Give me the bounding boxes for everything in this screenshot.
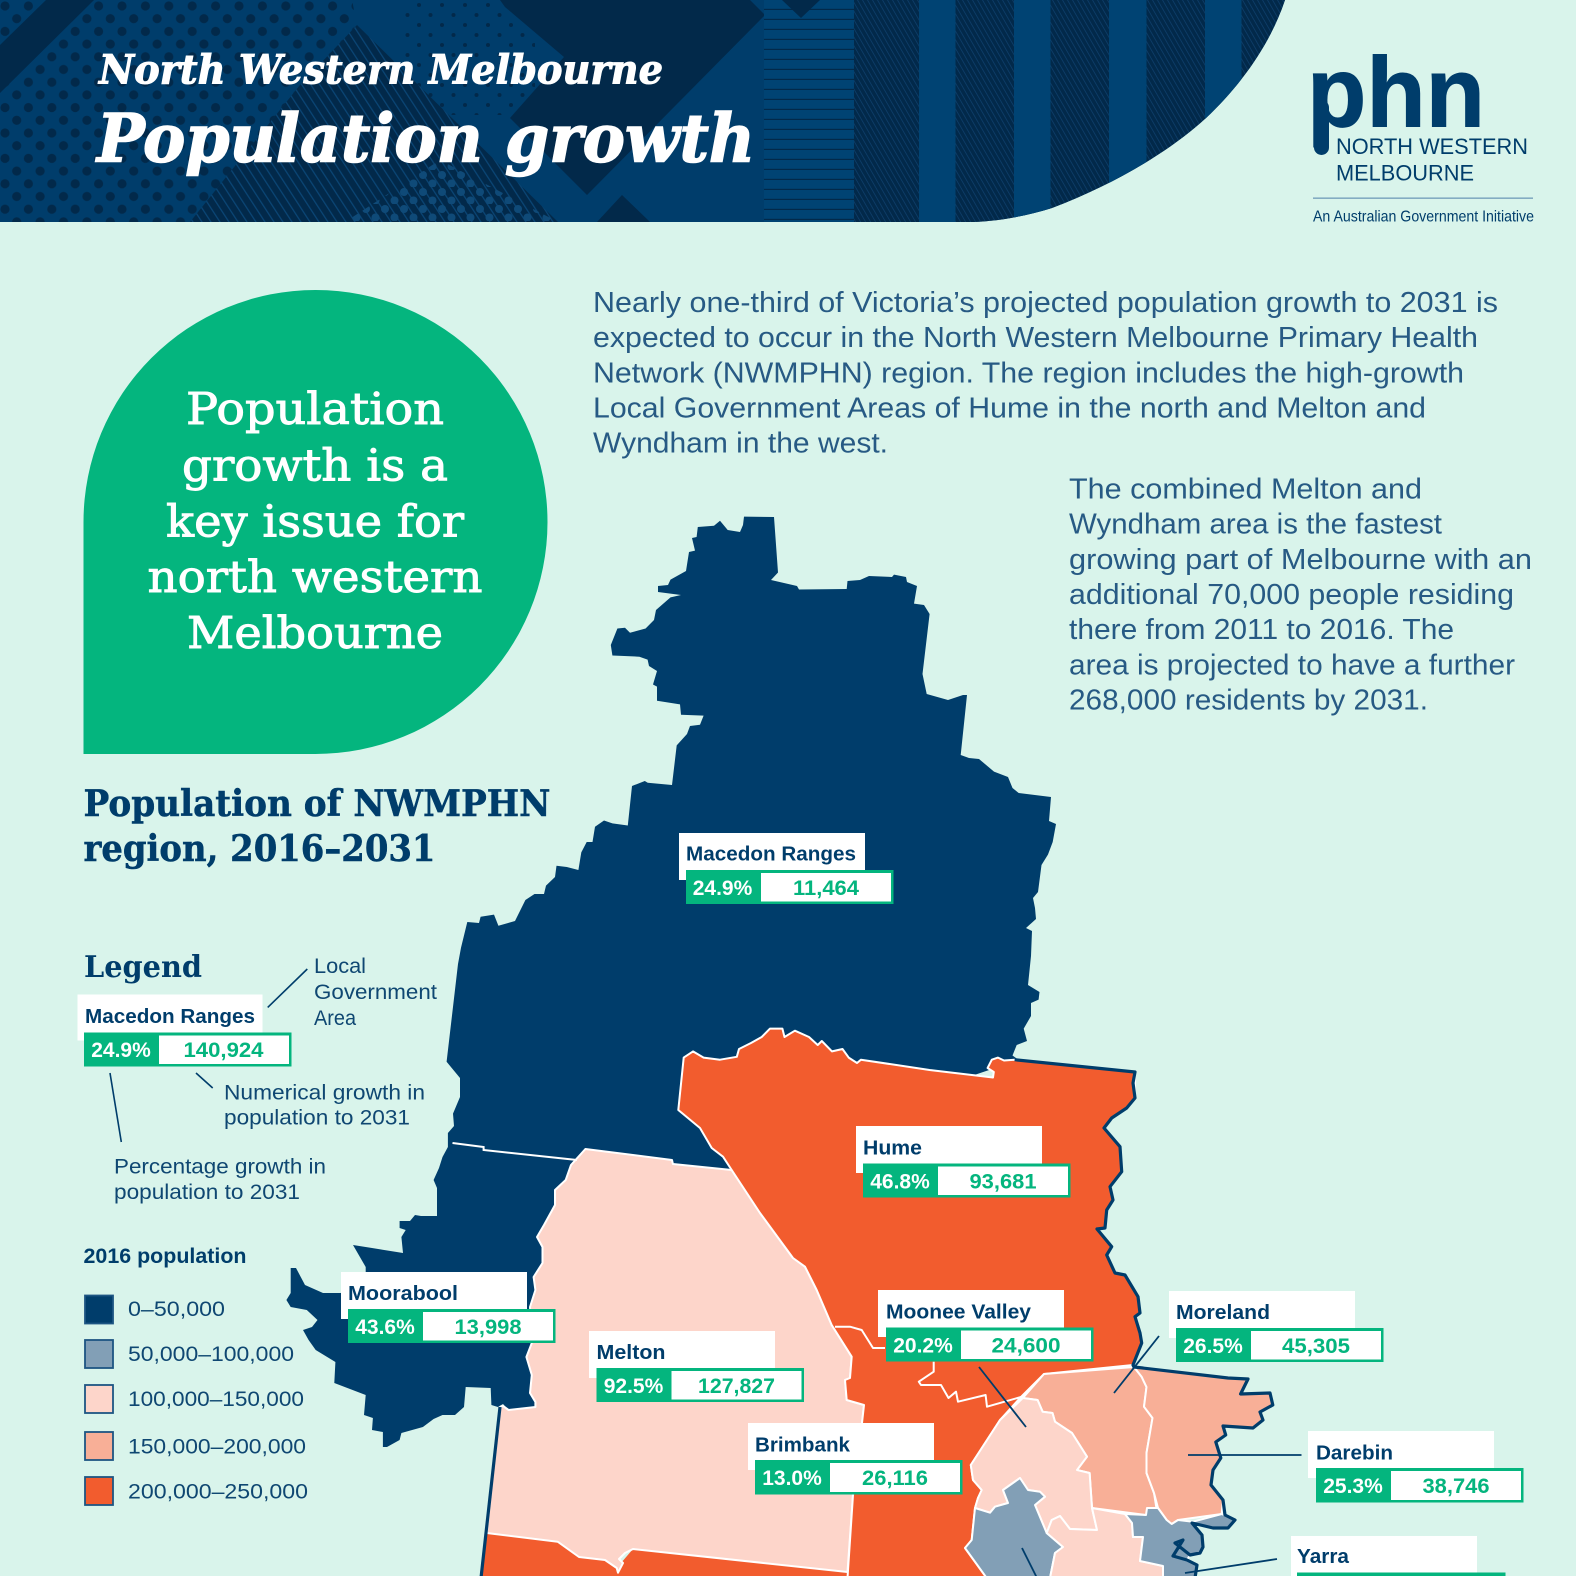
callout bubble: north western [148,552,482,603]
leader line: Moonee Valley [979,1367,1026,1427]
region: Moreland [1023,1367,1156,1515]
label: Moonee Valley: 20.2% [893,1334,953,1358]
annotation: Local Government Area: Local [314,955,366,978]
region: Darebin [1134,1367,1273,1524]
annotation: Local Government Area: Area [314,1007,356,1030]
label: Moreland [1169,1291,1384,1362]
label: Moonee Valley: 24,600 [992,1334,1060,1358]
region outline: western boundary [481,1407,500,1576]
legend sample label [78,994,292,1066]
label: Moreland: 45,305 [1282,1335,1350,1358]
logo: PHN North Western Melbourne [1307,36,1534,226]
2016 population scale heading: 2016 population [84,1245,246,1268]
second paragraph: Wyndham area is the fastest [1069,508,1442,540]
intro paragraph: Wyndham in the west. [593,428,888,460]
colour scale labels: 150,000–200,000 [128,1436,306,1458]
second paragraph: there from 2011 to 2016. The [1069,614,1454,646]
region: Maribyrnong [965,1478,1063,1576]
intro paragraph: Network (NWMPHN) region. The region includes the high-growth [593,358,1464,390]
second paragraph: growing part of Melbourne with an [1069,544,1532,576]
annotation: numerical growth [196,1073,425,1130]
label: Hume: 46.8% [870,1170,930,1194]
chart heading: Population of NWMPHN [84,783,550,825]
chart heading [84,783,550,870]
label: Moreland: Moreland [1176,1301,1270,1324]
boundary: Hume and Brimbank [835,1327,1021,1407]
label: Melton: 127,827 [698,1375,775,1398]
label: Moonee Valley: Moonee Valley [886,1300,1032,1324]
region: Melbourne [1047,1508,1163,1576]
label: Macedon Ranges [679,833,894,904]
intro paragraph: expected to occur in the North Western Melbourne Primary Health [593,322,1478,354]
callout bubble: growth is a [182,440,448,492]
boundary: Macedon Ranges and Moorabool [452,1143,577,1160]
label: Brimbank: Brimbank [755,1434,851,1456]
legend [78,950,437,1505]
second paragraph [1069,474,1532,716]
intro paragraph: Local Government Areas of Hume in the north and Melton and [593,392,1426,424]
callout bubble [84,290,548,754]
colour scale labels: 200,000–250,000 [128,1480,308,1504]
label: Moonee Valley [878,1290,1094,1362]
logo: PHN North Western Melbourne: An Australian Government Initiative [1313,208,1534,226]
annotation: percentage growth: population to 2031 [114,1181,300,1204]
region: Yarra [1125,1508,1235,1576]
label: Hume [856,1126,1070,1198]
map of NWMPHN region [286,517,1301,1576]
title: Population growth: Population growth [95,100,755,178]
colour scale [85,1296,113,1505]
label: Yarra [1291,1536,1506,1576]
label: Moorabool: 43.6% [355,1316,415,1339]
label: Melton: Melton [596,1341,666,1364]
label: Darebin: 25.3% [1323,1475,1383,1498]
legend sample label: 24.9% [91,1039,151,1062]
label: Moorabool: 13,998 [454,1316,522,1339]
colour scale labels [128,1298,308,1504]
leader line: Maribyrnong [1022,1548,1037,1576]
region outline: eastern boundary [1015,1060,1273,1576]
region: Hume and Brimbank [678,1029,1142,1576]
leader line: Moreland [1114,1336,1159,1393]
legend sample label: Macedon Ranges [85,1005,255,1028]
label: Macedon Ranges: 24.9% [693,877,753,900]
annotation: numerical growth: population to 2031 [224,1106,410,1130]
label: Brimbank [748,1423,962,1494]
colour scale labels: 100,000–150,000 [128,1388,304,1411]
label: Hume: Hume [863,1136,922,1160]
legend sample label: 140,924 [184,1039,264,1062]
annotation: Local Government Area: Government [314,981,437,1004]
second paragraph: additional 70,000 people residing [1069,579,1514,611]
logo: PHN North Western Melbourne: phn [1307,36,1485,148]
intro paragraph [593,287,1498,460]
callout bubble: Population [186,384,444,435]
label: Darebin: Darebin [1316,1442,1393,1464]
label: Brimbank: 13.0% [762,1467,822,1490]
annotation: percentage growth [110,1073,326,1204]
logo: PHN North Western Melbourne: NORTH WESTERN [1336,134,1528,159]
label: Moorabool: Moorabool [348,1282,458,1305]
label: Melton: 92.5% [604,1375,664,1398]
leader line: Yarra [1185,1559,1277,1573]
annotation: numerical growth: Numerical growth in [224,1082,425,1104]
annotation: percentage growth: Percentage growth in [114,1156,326,1178]
header banner [0,0,1300,222]
label: Moorabool [341,1272,556,1343]
label: Hume: 93,681 [970,1170,1037,1194]
callout bubble: Melbourne [187,608,443,659]
callout bubble: key issue for [166,496,465,548]
second paragraph: area is projected to have a further [1069,650,1515,682]
second paragraph: 268,000 residents by 2031. [1069,684,1428,716]
region: Moonee Valley [971,1398,1097,1533]
label: Darebin [1308,1431,1524,1502]
region: Melton [487,1149,864,1573]
leader line: Darebin [1188,1454,1302,1456]
annotation: Local Government Area [268,955,437,1030]
label: Darebin: 38,746 [1422,1475,1490,1498]
label: Melton [589,1331,804,1402]
label: Yarra: Yarra [1297,1545,1350,1568]
chart heading: region, 2016–2031 [84,828,436,870]
region: Wyndham [480,1533,848,1576]
second paragraph: The combined Melton and [1069,474,1422,506]
colour scale labels: 0–50,000 [128,1298,225,1321]
label: Macedon Ranges: Macedon Ranges [686,842,856,866]
label: Macedon Ranges: 11,464 [793,877,859,900]
intro paragraph: Nearly one-third of Victoria’s projected population growth to 2031 is [593,287,1498,319]
legend title: Legend [84,950,202,985]
region: Macedon Ranges and Moorabool [286,517,1056,1447]
label: Moreland: 26.5% [1183,1335,1243,1358]
title: North Western Melbourne: North Western Melbourne [97,46,663,94]
colour scale labels: 50,000–100,000 [128,1343,294,1366]
logo: PHN North Western Melbourne: MELBOURNE [1336,160,1474,186]
label: Brimbank: 26,116 [862,1467,928,1490]
